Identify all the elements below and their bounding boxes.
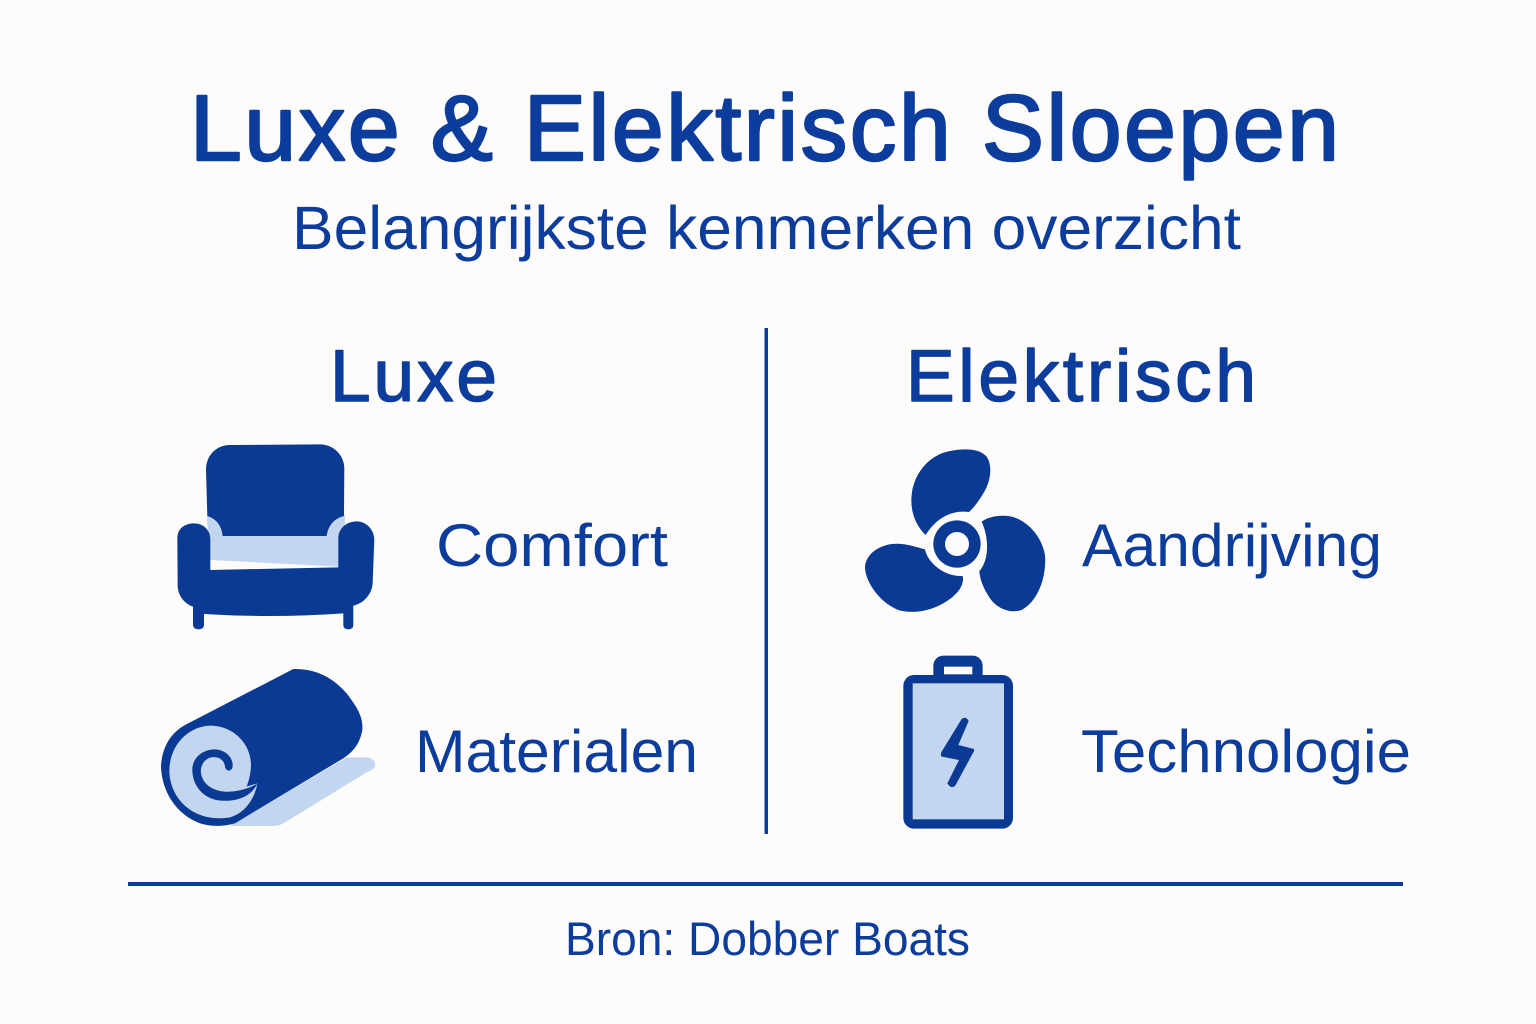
- label: Materialen: Materialen: [415, 718, 698, 785]
- title: Luxe & Elektrisch Sloepen: [190, 76, 1339, 180]
- heading: Elektrisch: Elektrisch: [906, 336, 1256, 417]
- subtitle: Belangrijkste kenmerken overzicht: [292, 194, 1241, 262]
- icon: propeller: [865, 449, 1045, 612]
- label: Aandrijving: Aandrijving: [1082, 512, 1382, 579]
- heading: Luxe: Luxe: [330, 336, 497, 417]
- icon: armchair: [177, 444, 374, 629]
- source line: Bron: Dobber Boats: [565, 912, 970, 965]
- icon: fabric roll: [161, 669, 375, 826]
- label: Technologie: Technologie: [1081, 718, 1411, 785]
- label: Comfort: Comfort: [436, 512, 668, 579]
- icon: battery: [903, 656, 1013, 829]
